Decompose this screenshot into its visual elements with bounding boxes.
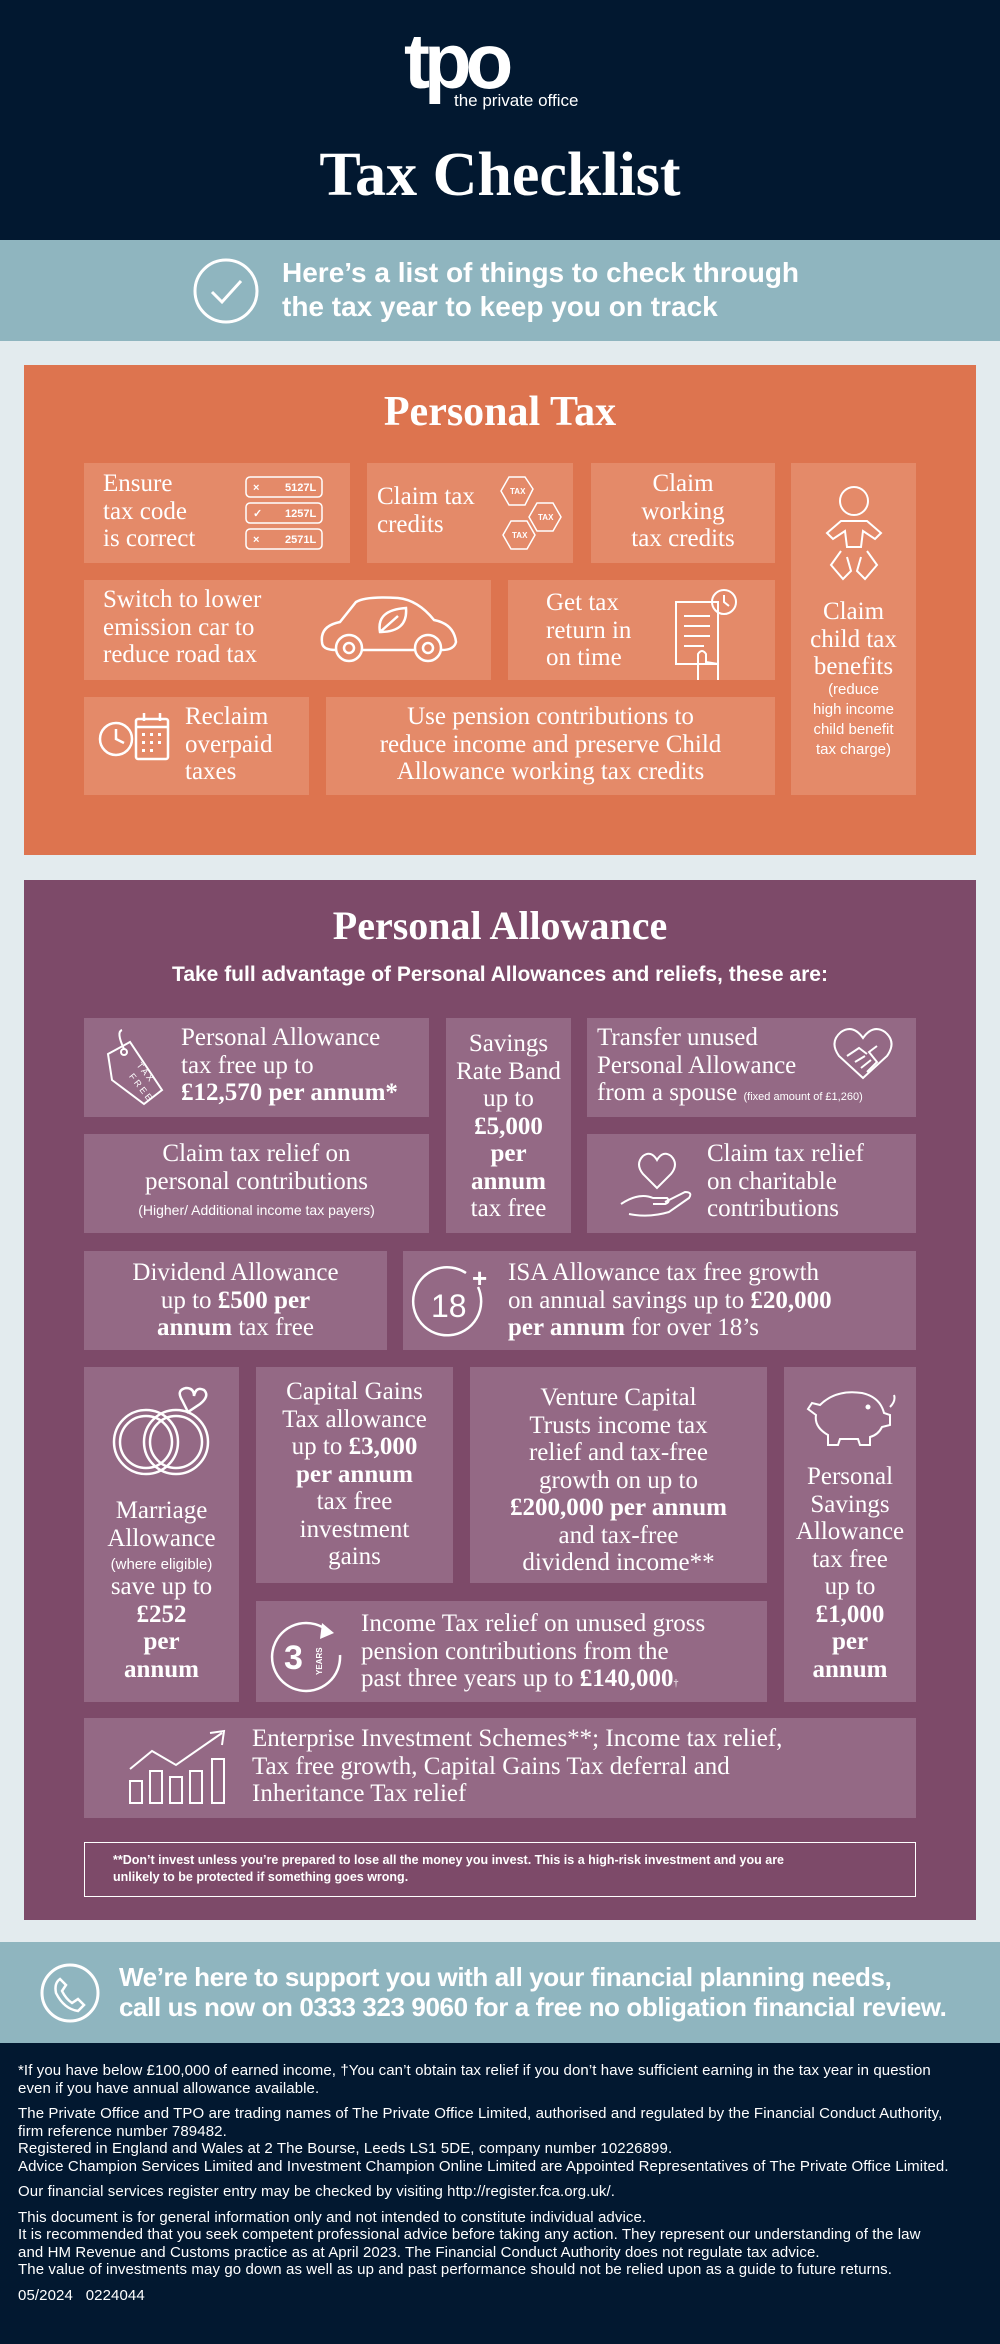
tile: claim working tax credits: tax credits: [631, 525, 735, 552]
tile: marriage allowance: [84, 1367, 239, 1702]
tile: personal savings allowance: £1,000: [816, 1600, 884, 1628]
tile: savings rate band: tax free: [471, 1195, 546, 1222]
icon: hand with heart: [620, 1152, 692, 1217]
logo: tpo: [404, 17, 507, 105]
tile: charitable contributions: on charitable: [707, 1168, 837, 1194]
icon: 3 years: 3: [284, 1639, 303, 1677]
footer text: and HM Revenue and Customs practice as at April 2023. The Financial Conduct Authority does not regulate tax advice.: [18, 2244, 820, 2260]
disclaimer box: [84, 1842, 916, 1897]
footer text: Registered in England and Wales at 2 The Bourse, Leeds LS1 5DE, company number 10226899.: [18, 2140, 672, 2157]
tile: pension contributions: [326, 697, 775, 795]
icon: tax badges: [500, 476, 562, 550]
icon: 18+: 18: [431, 1288, 467, 1324]
icon: car with leaf: [320, 596, 458, 662]
tile: child tax benefits: Claim: [823, 598, 884, 625]
tile: personal contributions: [84, 1134, 429, 1233]
tile: venture capital trusts: growth on up to: [539, 1466, 698, 1494]
intro text: Here’s a list of things to check through: [282, 257, 799, 288]
tile: personal savings allowance: tax free: [812, 1546, 888, 1572]
tile: charitable contributions: Claim tax relief: [707, 1140, 864, 1167]
tile: claim working tax credits: [591, 463, 775, 563]
footer text: even if you have annual allowance available.: [18, 2080, 319, 2096]
footer text: [18, 2062, 949, 2304]
tile: venture capital trusts: and tax-free: [558, 1522, 679, 1548]
tile: dividend allowance: Dividend Allowance: [132, 1259, 339, 1286]
tile: ISA allowance: on annual savings up to £20,000: [508, 1286, 832, 1314]
heading: Personal Allowance: [333, 903, 667, 948]
tile: capital gains: per annum: [296, 1460, 413, 1488]
icon: 3 years: [270, 1622, 342, 1692]
intro band: [0, 240, 1000, 341]
footer text: Our financial services register entry may be checked by visiting http://register.fca.org.uk/.: [18, 2183, 615, 2200]
icon: baby: [826, 486, 882, 580]
intro text: [282, 257, 799, 322]
tile: marriage allowance: per: [143, 1628, 180, 1655]
tile: personal contributions: Claim tax relief on: [162, 1140, 351, 1167]
icon: clock and calendar: [98, 713, 170, 760]
tile: dividend allowance: [84, 1251, 387, 1350]
tile: personal allowance: tax free up to: [181, 1052, 314, 1078]
icon: tax badges: TAX: [510, 487, 526, 496]
icon: tax codes: 2571L: [285, 534, 316, 546]
tile: claim working tax credits: working: [641, 498, 725, 524]
tile: ensure tax code: is correct: [103, 525, 195, 552]
header: [0, 0, 1000, 240]
icon: phone: [40, 1964, 100, 2022]
tile: enterprise investment schemes: Tax free growth, Capital Gains Tax deferral and: [252, 1752, 730, 1780]
tile: income tax relief unused pension: [256, 1601, 767, 1702]
footer text: It is recommended that you seek competent professional advice before taking any action. They represent our understanding of the law: [18, 2226, 921, 2243]
tile: capital gains: tax free: [317, 1488, 392, 1515]
panel: personal tax: [24, 365, 976, 855]
tile: capital gains: [256, 1367, 453, 1583]
tile: transfer unused: Transfer unused: [597, 1024, 758, 1051]
tile: pension contributions: Use pension contributions to: [407, 703, 694, 730]
tile: personal savings allowance: per: [832, 1628, 868, 1655]
icon: 18+: [412, 1263, 487, 1336]
tile: tax return on time: Get tax: [546, 589, 619, 616]
tile: venture capital trusts: relief and tax-free: [529, 1439, 708, 1466]
tile: savings rate band: Savings: [469, 1030, 548, 1057]
contact text: [119, 1962, 946, 2022]
tile: child tax benefits: high income: [813, 701, 894, 718]
tile: child tax benefits: child tax: [810, 626, 897, 652]
tile: savings rate band: per: [490, 1140, 527, 1167]
logo: [404, 17, 578, 110]
icon: tax codes: ×: [253, 482, 259, 494]
icon: heart handshake: [833, 1028, 893, 1080]
tile: child tax benefits: child benefit: [813, 721, 894, 738]
icon: tax codes: 1257L: [285, 508, 316, 520]
disclaimer box: unlikely to be protected if something goes wrong.: [113, 1870, 408, 1884]
icon: rings: [112, 1386, 210, 1476]
tile: transfer unused: from a spouse (fixed amount of £1,260): [597, 1079, 863, 1106]
tile: claim working tax credits: Claim: [652, 470, 714, 497]
contact text: call us now on 0333 323 9060 for a free no obligation financial review.: [119, 1992, 946, 2022]
tile: claim tax credits: Claim tax: [377, 483, 475, 510]
tile: transfer unused: Personal Allowance: [597, 1052, 796, 1078]
tile: child tax benefits: benefits: [814, 653, 893, 680]
tile: personal savings allowance: annum: [812, 1656, 888, 1682]
tile: ISA allowance: [403, 1251, 916, 1350]
tile: tax return on time: return in: [546, 616, 631, 644]
tile: enterprise investment schemes: [84, 1718, 916, 1818]
footer text: This document is for general information only and not intended to constitute individual advice.: [18, 2208, 646, 2226]
icon: tax codes: ×: [253, 534, 259, 546]
tile: marriage allowance: £252: [136, 1600, 186, 1628]
tile: child tax benefits: tax charge): [816, 741, 891, 758]
tile: reclaim overpaid: [84, 697, 309, 795]
tile: ISA allowance: ISA Allowance tax free growth: [508, 1259, 819, 1286]
tile: lower emission car: reduce road tax: [103, 641, 257, 668]
tile: tax return on time: on time: [546, 644, 622, 671]
icon: tax codes: ✓: [253, 508, 262, 520]
icon: tax free tag: F R E E: [127, 1072, 154, 1102]
tile: enterprise investment schemes: Inheritance Tax relief: [252, 1780, 466, 1807]
icon: tax codes: 5127L: [285, 482, 316, 494]
footer text: firm reference number 789482.: [18, 2122, 227, 2140]
tile: marriage allowance: Allowance: [107, 1524, 216, 1552]
tile: lower emission car: [84, 580, 491, 680]
tile: reclaim overpaid: overpaid: [185, 730, 272, 758]
tile: marriage allowance: Marriage: [116, 1497, 207, 1524]
contact band: [0, 1942, 1000, 2043]
logo: the private office: [454, 91, 578, 110]
tile: pension contributions: reduce income and preserve Child: [380, 730, 721, 758]
footer text: The Private Office and TPO are trading names of The Private Office Limited, authorised and regulated by the Financial Conduct Authority,: [18, 2105, 942, 2122]
tile: charitable contributions: [587, 1134, 916, 1233]
tile: ensure tax code: tax code: [103, 498, 187, 524]
icon: check circle: [194, 258, 258, 324]
tile: personal allowance: [84, 1018, 429, 1117]
tile: savings rate band: Rate Band: [456, 1058, 561, 1084]
icon: growth chart: [129, 1730, 226, 1804]
tile: lower emission car: emission car to: [103, 614, 254, 640]
panel: personal allowance: [24, 880, 976, 1920]
tile: venture capital trusts: Venture Capital: [540, 1384, 697, 1411]
tile: marriage allowance: annum: [124, 1656, 199, 1682]
footer text: The value of investments may go down as well as up and past performance should not be relied upon as a guide to future returns.: [18, 2261, 892, 2278]
icon: 3 years: YEARS: [315, 1647, 324, 1675]
tile: personal savings allowance: up to: [825, 1573, 875, 1600]
footer text: *If you have below £100,000 of earned income, †You can’t obtain tax relief if you don’t have sufficient earning in the tax year in question: [18, 2062, 931, 2079]
tile: personal contributions: personal contributions: [145, 1168, 368, 1194]
tile: claim tax credits: [367, 463, 573, 563]
tile: personal allowance: £12,570 per annum*: [181, 1079, 398, 1106]
icon: tax codes: [245, 476, 323, 550]
contact text: We’re here to support you with all your financial planning needs,: [119, 1962, 891, 1992]
intro text: the tax year to keep you on track: [282, 291, 718, 322]
tile: enterprise investment schemes: Enterprise Investment Schemes**; Income tax relief,: [252, 1725, 782, 1752]
tile: savings rate band: annum: [471, 1168, 546, 1194]
tile: dividend allowance: annum tax free: [157, 1314, 314, 1341]
tile: ensure tax code: [84, 463, 350, 563]
tile: personal savings allowance: Savings: [810, 1490, 890, 1518]
tile: capital gains: Capital Gains: [286, 1378, 423, 1405]
icon: tax free tag: [106, 1029, 164, 1106]
tile: personal contributions: (Higher/ Additional income tax payers): [138, 1202, 375, 1218]
tile: personal savings allowance: Personal: [807, 1463, 893, 1490]
tile: tax return on time: [508, 580, 775, 680]
tile: income tax relief unused pension: pension contributions from the: [361, 1638, 669, 1664]
tile: reclaim overpaid: taxes: [185, 758, 236, 785]
subheading: Take full advantage of Personal Allowances and reliefs, these are:: [172, 963, 828, 986]
tile: child tax benefits: (reduce: [828, 681, 879, 698]
title: Tax Checklist: [319, 141, 681, 209]
tile: capital gains: gains: [328, 1543, 381, 1570]
tile: pension contributions: Allowance working tax credits: [397, 758, 704, 785]
icon: piggy bank: [806, 1391, 896, 1446]
tile: dividend allowance: up to £500 per: [161, 1286, 310, 1314]
tile: income tax relief unused pension: Income Tax relief on unused gross: [361, 1610, 705, 1637]
tile: venture capital trusts: £200,000 per annum: [510, 1494, 727, 1521]
tile: venture capital trusts: dividend income**: [522, 1549, 715, 1576]
footer: [0, 2043, 1000, 2344]
icon: tax free tag: T A X: [135, 1060, 156, 1083]
tile: ISA allowance: per annum for over 18’s: [508, 1314, 759, 1341]
icon: 18+: +: [472, 1263, 487, 1293]
tile: venture capital trusts: Trusts income tax: [529, 1412, 708, 1438]
tile: ensure tax code: Ensure: [103, 470, 172, 497]
tile: marriage allowance: save up to: [111, 1573, 212, 1600]
footer text: 05/2024 0224044: [18, 2286, 145, 2304]
tile: marriage allowance: (where eligible): [111, 1556, 212, 1573]
icon: tax badges: TAX: [512, 531, 528, 540]
tile: venture capital trusts: [470, 1367, 767, 1583]
tile: personal savings allowance: [784, 1367, 916, 1702]
tile: personal allowance: Personal Allowance: [181, 1024, 380, 1051]
tile: savings rate band: up to: [483, 1085, 534, 1112]
tile: capital gains: investment: [300, 1516, 409, 1542]
tile: savings rate band: [446, 1018, 571, 1233]
tile: personal savings allowance: Allowance: [796, 1518, 904, 1545]
tile: reclaim overpaid: Reclaim: [185, 703, 268, 730]
icon: document with clock: [675, 589, 737, 680]
tile: transfer unused: [587, 1018, 916, 1117]
tile: capital gains: up to £3,000: [292, 1433, 417, 1460]
disclaimer box: **Don’t invest unless you’re prepared to lose all the money you invest. This is a high-risk investment and you are: [113, 1853, 784, 1867]
tile: capital gains: Tax allowance: [282, 1406, 427, 1432]
tile: savings rate band: £5,000: [474, 1112, 543, 1140]
tile: child tax benefits: [791, 463, 916, 795]
tile: claim tax credits: credits: [377, 510, 444, 538]
icon: tax badges: TAX: [538, 513, 554, 522]
heading: Personal Tax: [384, 389, 616, 435]
tile: charitable contributions: contributions: [707, 1195, 839, 1222]
tile: lower emission car: Switch to lower: [103, 586, 261, 613]
footer text: Advice Champion Services Limited and Investment Champion Online Limited are Appointed Representatives of The Private Office Limited.: [18, 2158, 949, 2174]
tile: income tax relief unused pension: past three years up to £140,000†: [361, 1665, 678, 1692]
